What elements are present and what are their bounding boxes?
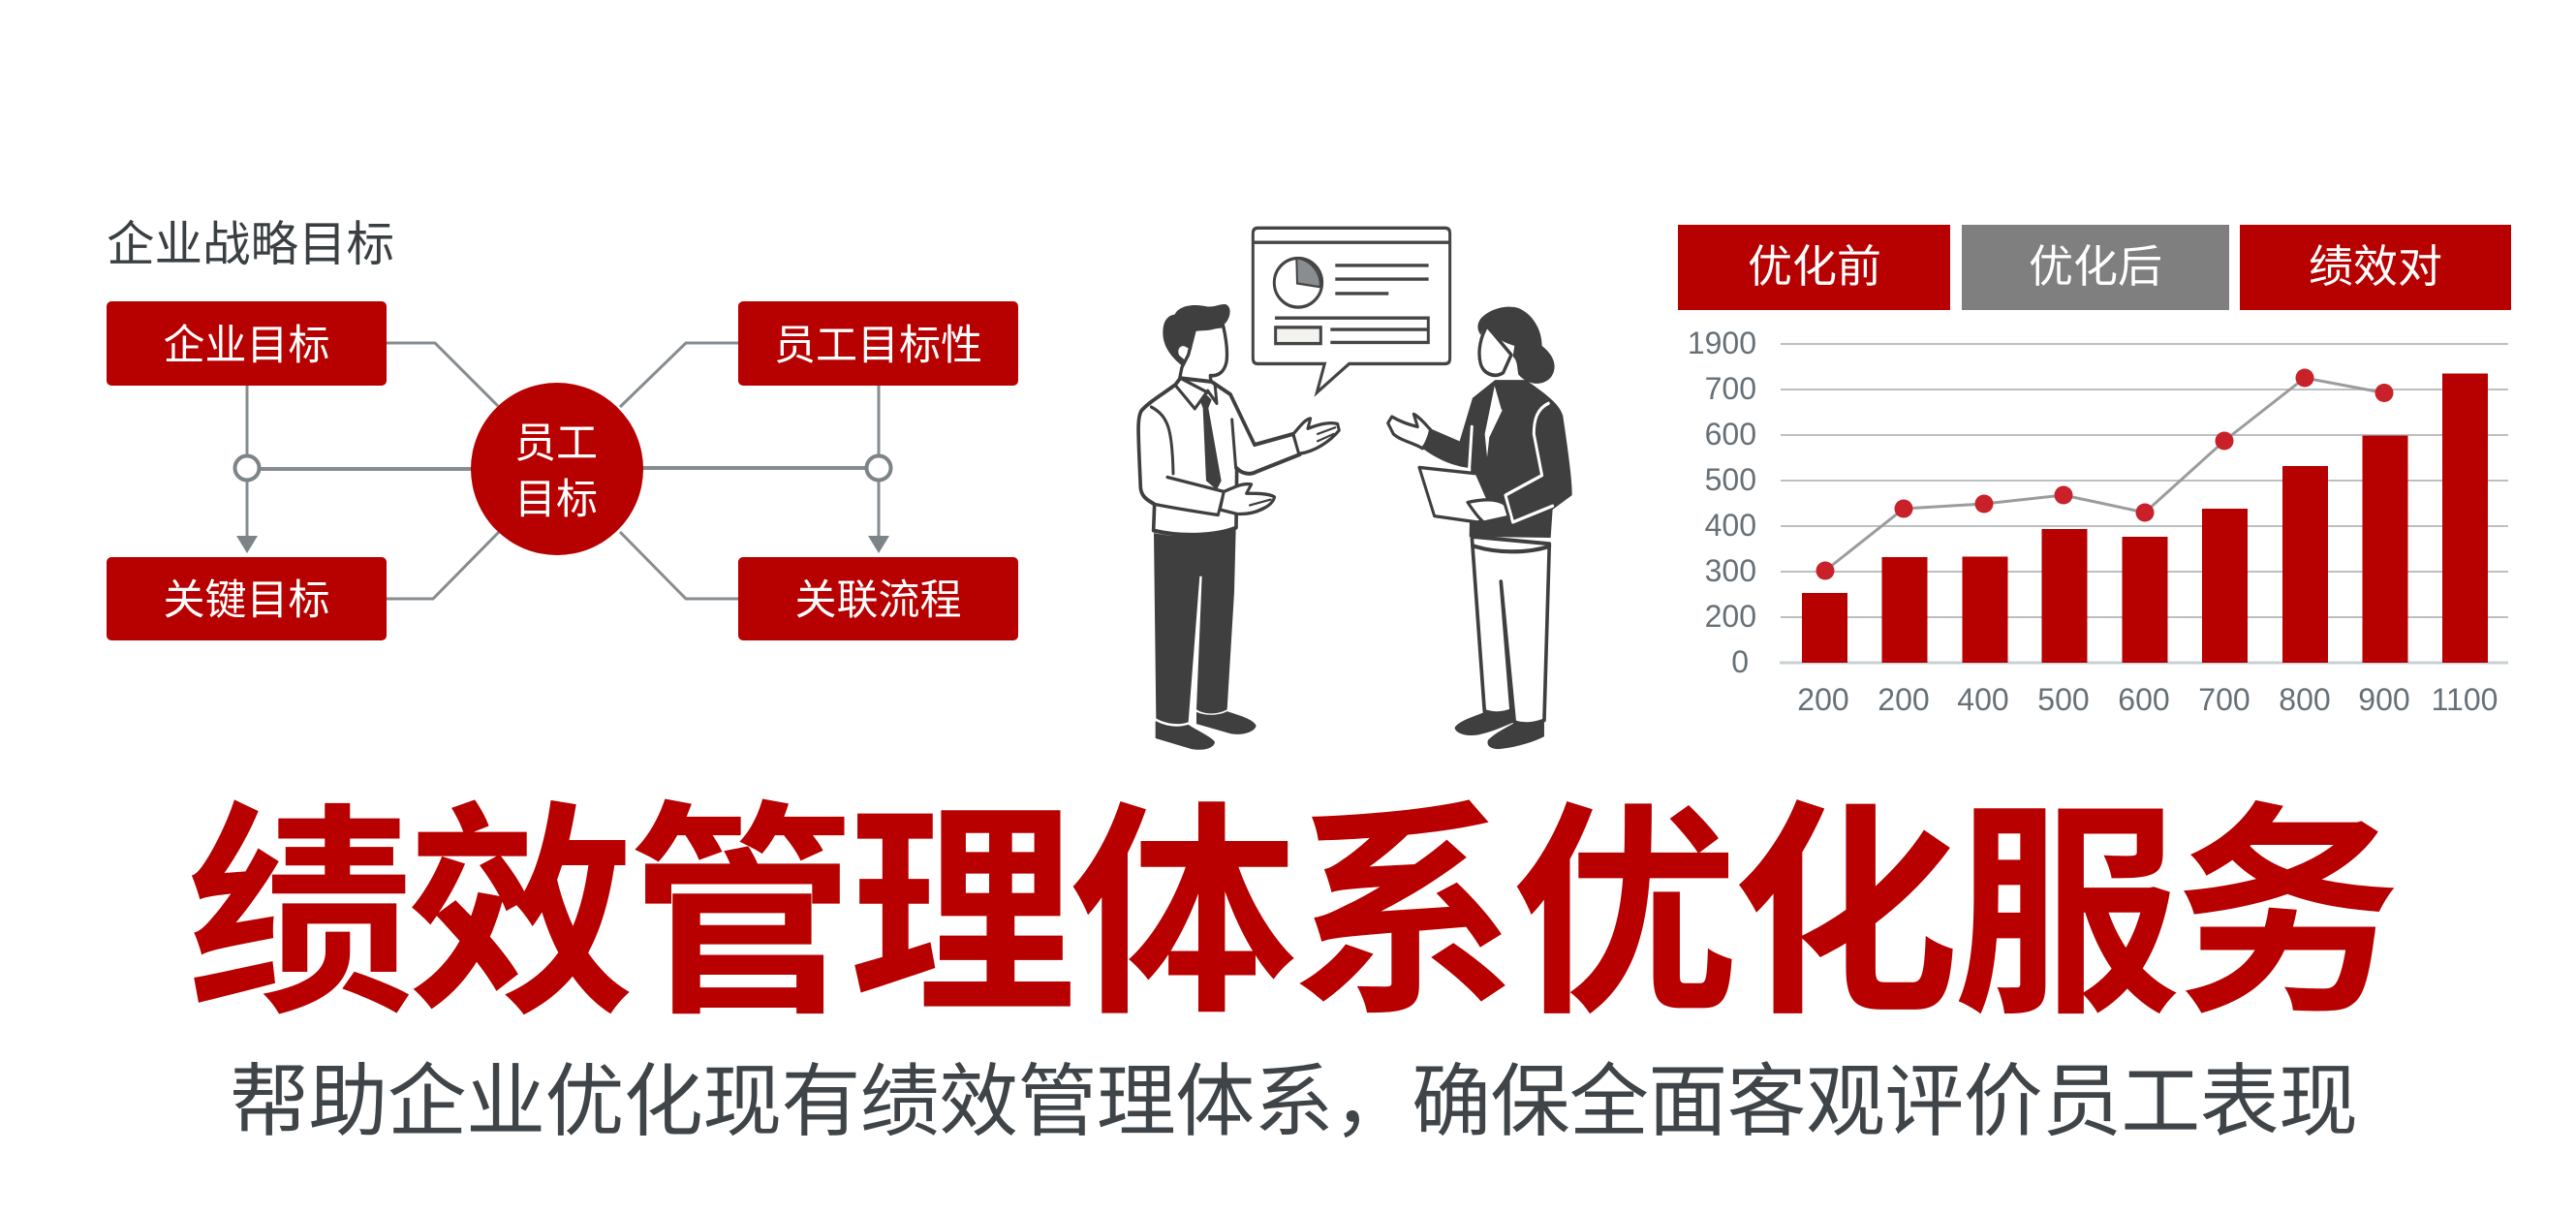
x axis labels: 600 bbox=[2118, 682, 2170, 717]
tab: before optimization: 优化前 bbox=[1748, 232, 1881, 296]
center circle: employee goal: 员工 bbox=[514, 410, 598, 470]
y axis labels: 200 bbox=[1705, 599, 1756, 634]
tab: performance comparison: 绩效对 bbox=[2309, 232, 2442, 296]
box: company goal: 企业目标 bbox=[163, 312, 329, 372]
y axis labels: 700 bbox=[1705, 371, 1756, 406]
arrow: right down bbox=[868, 536, 889, 553]
woman bbox=[1388, 307, 1572, 749]
box: employee goal attribute: 员工目标性 bbox=[774, 312, 982, 372]
illustration: two people discussing bbox=[1138, 228, 1572, 750]
speech bubble with dashboard bbox=[1253, 228, 1450, 392]
subtitle: 帮助企业优化现有绩效管理体系，确保全面客观评价员工表现 bbox=[230, 1037, 2358, 1152]
x axis labels: 700 bbox=[2198, 682, 2250, 717]
tab: performance comparison bbox=[2240, 225, 2511, 310]
connector lines bbox=[247, 343, 879, 599]
center circle: employee goal bbox=[471, 383, 643, 555]
bar series bbox=[1802, 374, 2488, 663]
man bbox=[1138, 304, 1339, 750]
x axis labels: 200 bbox=[1797, 682, 1849, 717]
box: employee goal attribute bbox=[738, 301, 1018, 386]
panel: strategy goal diagram bbox=[107, 206, 1018, 640]
x axis labels: 800 bbox=[2279, 682, 2331, 717]
box: key goal: 关键目标 bbox=[163, 567, 329, 627]
title: 绩效管理体系优化服务 bbox=[187, 732, 2401, 1059]
y axis labels: 500 bbox=[1705, 462, 1756, 497]
line series with markers bbox=[1816, 368, 2393, 579]
x axis labels: 400 bbox=[1957, 682, 2009, 717]
y axis labels: 600 bbox=[1705, 417, 1756, 452]
center circle: employee goal: 目标 bbox=[514, 466, 598, 526]
heading: strategic goals: 企业战略目标 bbox=[107, 206, 394, 275]
y axis labels: 1900 bbox=[1688, 326, 1756, 360]
y axis labels: 0 bbox=[1731, 644, 1749, 679]
y axis labels: 400 bbox=[1705, 508, 1756, 543]
tab: after optimization bbox=[1962, 225, 2229, 310]
panel: performance chart bbox=[1678, 225, 2511, 717]
tab: after optimization: 优化后 bbox=[2029, 232, 2162, 296]
x axis labels: 1100 bbox=[2432, 682, 2498, 717]
y axis labels bbox=[1688, 326, 1756, 679]
x axis labels bbox=[1797, 682, 2498, 717]
box: company goal bbox=[107, 301, 387, 386]
node: left junction bbox=[234, 455, 260, 481]
x axis labels: 200 bbox=[1878, 682, 1930, 717]
x axis labels: 500 bbox=[2037, 682, 2090, 717]
node: right junction bbox=[866, 455, 891, 481]
box: linked process bbox=[738, 557, 1018, 640]
tab: before optimization bbox=[1678, 225, 1950, 310]
x axis labels: 900 bbox=[2358, 682, 2410, 717]
box: linked process: 关联流程 bbox=[794, 567, 961, 627]
arrow: left down bbox=[236, 536, 258, 553]
box: key goal bbox=[107, 557, 387, 640]
y axis labels: 300 bbox=[1705, 553, 1756, 588]
